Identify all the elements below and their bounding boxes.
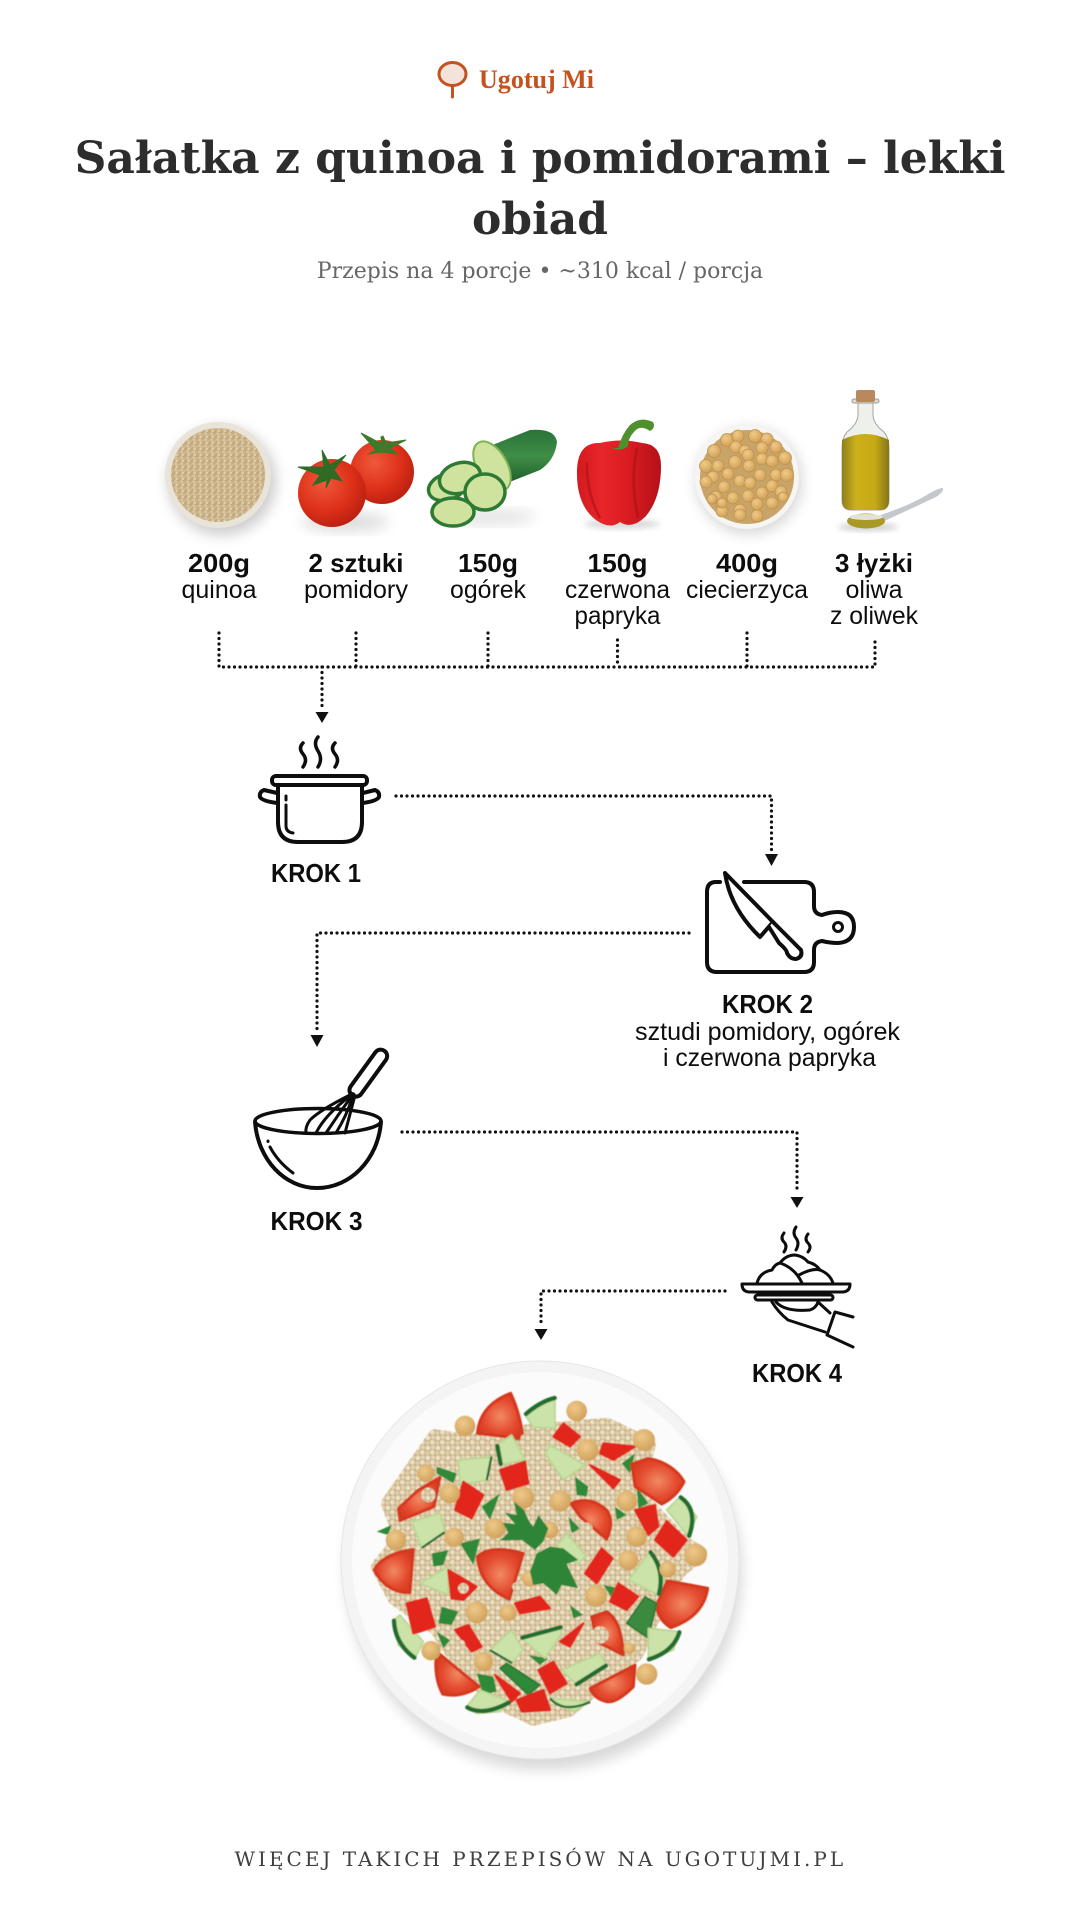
label: cucumber <box>450 548 526 604</box>
step 2 description: sztudi pomidory, ogórek <box>635 1018 900 1046</box>
label: chickpeas: 400g <box>716 548 778 578</box>
logo <box>439 62 594 97</box>
icon: hand serving plate <box>742 1227 853 1347</box>
step 4 label: KROK 4 <box>752 1358 842 1388</box>
title: Sałatka z quinoa i pomidorami – lekki <box>75 133 1005 184</box>
brand name: Ugotuj Mi <box>479 65 594 94</box>
label: cucumber: 150g <box>458 548 518 578</box>
label: olive oil: 3 łyżki <box>835 548 913 578</box>
ingredient: tomatoes <box>298 433 414 531</box>
finished dish: salad plate <box>341 1361 742 1770</box>
parsley garnish <box>500 1502 578 1595</box>
label: quinoa <box>182 548 257 604</box>
label: olive oil <box>830 548 918 630</box>
step 2 description: i czerwona papryka <box>663 1044 876 1072</box>
step 2 label: KROK 2 <box>722 989 813 1019</box>
label: chickpeas: ciecierzyca <box>686 576 808 604</box>
label: red pepper: czerwona <box>565 576 670 604</box>
label: red pepper <box>565 548 670 630</box>
connector: step 1 to step 2 <box>396 796 778 866</box>
icon: cutting board and knife <box>707 873 854 972</box>
ingredient: cucumber <box>425 430 557 526</box>
label: chickpeas <box>686 548 808 604</box>
ingredient: quinoa bowl <box>165 422 276 535</box>
label: quinoa: 200g <box>188 548 250 578</box>
label: olive oil: z oliwek <box>830 602 918 630</box>
ingredient: olive oil and spoon <box>838 390 943 531</box>
subtitle: Przepis na 4 porcje • ~310 kcal / porcja <box>317 259 763 284</box>
label: tomatoes: 2 sztuki <box>308 548 404 578</box>
label: red pepper: papryka <box>574 602 661 630</box>
connector: step 4 to finished dish <box>534 1291 725 1340</box>
label: tomatoes <box>304 548 408 604</box>
connector: ingredients to step 1 <box>219 633 875 723</box>
salad toppings <box>374 1393 708 1718</box>
label: olive oil: oliwa <box>846 576 903 604</box>
label: tomatoes: pomidory <box>304 576 408 604</box>
icon: bowl with whisk <box>255 1047 390 1188</box>
label: cucumber: ogórek <box>450 576 526 604</box>
label: quinoa: quinoa <box>182 576 257 604</box>
step 1 label: KROK 1 <box>271 858 361 888</box>
ingredient labels <box>182 548 918 630</box>
connector: step 2 to step 3 <box>310 933 689 1047</box>
connector: step 3 to step 4 <box>402 1132 804 1208</box>
ingredient: red pepper <box>577 420 661 529</box>
title: obiad <box>472 194 608 245</box>
step 3 label: KROK 3 <box>270 1206 362 1236</box>
label: red pepper: 150g <box>588 548 648 578</box>
step 2 text <box>635 989 900 1072</box>
icon: logo spoon <box>439 62 466 97</box>
icon: pot with steam <box>260 737 379 842</box>
ingredient: chickpea bowl <box>695 425 802 534</box>
footer: WIĘCEJ TAKICH PRZEPISÓW NA UGOTUJMI.PL <box>234 1846 846 1871</box>
